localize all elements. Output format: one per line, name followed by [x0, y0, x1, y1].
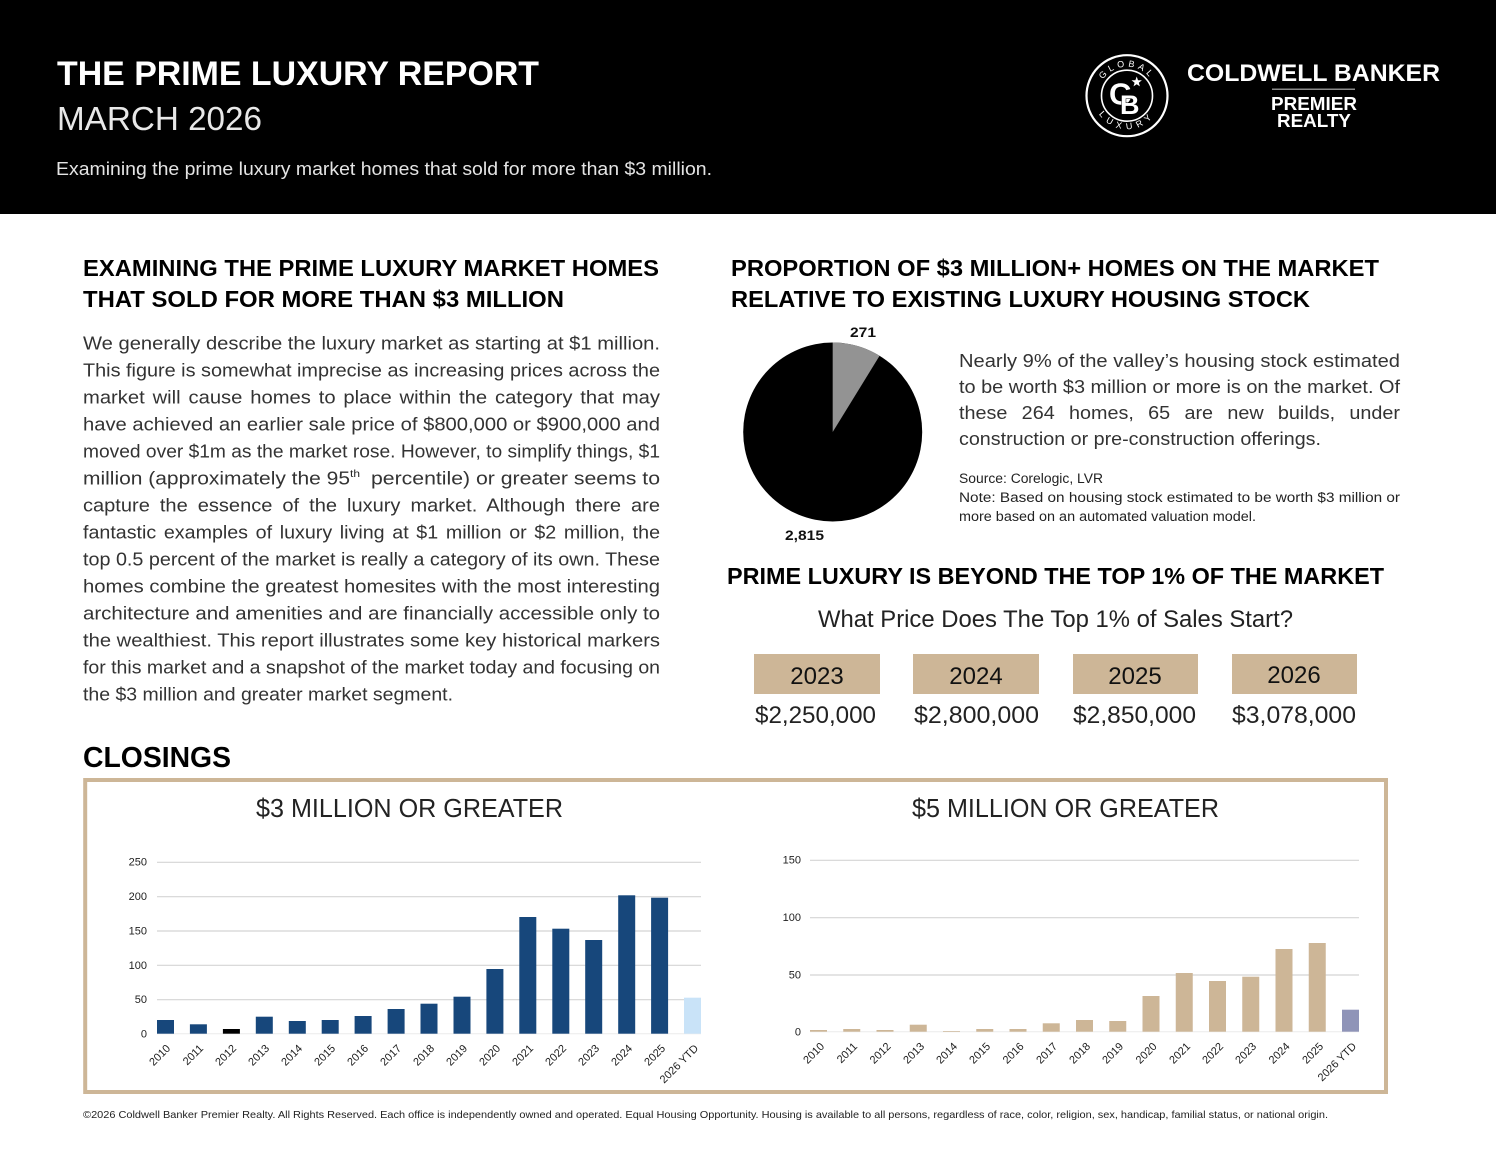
article body text: for this market and a snapshot of the market today and focusing on — [83, 658, 660, 678]
panel: intro article — [83, 255, 660, 704]
proportion description: these 264 homes, 65 are new builds, under — [959, 403, 1400, 423]
closings heading: CLOSINGS — [83, 742, 231, 774]
x axis labels: 2013 — [901, 1041, 927, 1066]
proportion description — [959, 351, 1401, 449]
bars — [810, 943, 1359, 1032]
footer disclaimer: ©2026 Coldwell Banker Premier Realty. All Rights Reserved. Each office is independently owned and operated. Equal Housing Opportunity. Housing is available to all persons, regardless of race, color, religion, sex, handicap, familial status, or national origin. — [83, 1109, 1328, 1121]
x axis labels: 2015 — [967, 1041, 993, 1066]
x axis labels — [147, 1043, 701, 1086]
x axis labels: 2017 — [378, 1043, 404, 1068]
y axis labels — [129, 856, 147, 1040]
x axis labels: 2010 — [801, 1041, 827, 1066]
x axis labels: 2016 — [1001, 1041, 1027, 1066]
chart title: $3 MILLION OR GREATER — [256, 793, 563, 823]
year card 2026 — [1232, 654, 1357, 729]
panel: closings frame — [85, 780, 1386, 1092]
top 1% question: What Price Does The Top 1% of Sales Start? — [818, 606, 1293, 633]
brand wordmark: PREMIER — [1271, 93, 1357, 114]
x axis labels: 2025 — [642, 1043, 668, 1068]
proportion heading: RELATIVE TO EXISTING LUXURY HOUSING STOCK — [731, 286, 1310, 312]
source note: Note: Based on housing stock estimated to be worth $3 million or — [959, 490, 1401, 505]
y axis labels — [783, 854, 801, 1038]
x axis labels: 2024 — [1267, 1041, 1293, 1066]
y axis labels: 50 — [135, 994, 147, 1006]
y axis labels: 100 — [129, 960, 147, 972]
year card 2026: $3,078,000 — [1232, 702, 1356, 729]
x axis labels: 2022 — [1200, 1041, 1226, 1066]
x axis labels: 2023 — [1233, 1041, 1259, 1066]
chart title: $5 MILLION OR GREATER — [912, 793, 1219, 823]
article body text: million (approximately the 95 — [83, 468, 350, 488]
x axis labels: 2019 — [444, 1043, 470, 1068]
article body text: fantastic examples of luxury living at $1 million or $2 million, the — [83, 522, 660, 542]
article body text: market will cause homes to place within the category that may — [83, 388, 660, 408]
proportion description: construction or pre-construction offerings. — [959, 429, 1321, 449]
proportion heading: PROPORTION OF $3 MILLION+ HOMES ON THE MARKET — [731, 255, 1379, 281]
y axis labels: 250 — [129, 856, 147, 868]
y axis labels: 50 — [789, 970, 801, 982]
bars — [157, 895, 701, 1034]
article body text: We generally describe the luxury market as starting at $1 million. — [83, 334, 660, 354]
x axis labels: 2016 — [345, 1043, 371, 1068]
header band — [0, 0, 1496, 214]
article body text: the $3 million and greater market segment. — [83, 684, 453, 704]
brand wordmark — [1187, 60, 1440, 131]
x axis labels: 2010 — [147, 1043, 173, 1068]
x axis labels: 2018 — [411, 1043, 437, 1068]
year card 2024: $2,800,000 — [914, 702, 1039, 729]
header subtitle: Examining the prime luxury market homes that sold for more than $3 million. — [56, 158, 712, 179]
x axis labels: 2011 — [835, 1041, 860, 1066]
year card 2026: 2026 — [1267, 662, 1321, 689]
article body text: moved over $1m as the market rose. However, to simplify things, $1 — [83, 442, 660, 462]
panel: top 1% price — [727, 563, 1384, 729]
source note: more based on an automated valuation model. — [959, 509, 1256, 524]
year card 2023: $2,250,000 — [755, 702, 876, 729]
proportion description: Nearly 9% of the valley’s housing stock estimated — [959, 351, 1400, 371]
x axis labels: 2012 — [868, 1041, 894, 1066]
x axis labels: 2025 — [1300, 1041, 1326, 1066]
x axis labels: 2021 — [510, 1043, 536, 1068]
x axis labels: 2026 YTD — [658, 1043, 701, 1086]
x axis labels: 2019 — [1100, 1041, 1126, 1066]
proportion heading — [731, 255, 1379, 312]
x axis labels: 2024 — [609, 1043, 635, 1068]
x axis labels: 2023 — [576, 1043, 602, 1068]
x axis labels: 2011 — [181, 1043, 206, 1068]
icon: global luxury logo seal: C — [1109, 76, 1131, 112]
article body text: architecture and amenities and are financially accessible only to — [83, 604, 660, 624]
x axis labels: 2014 — [279, 1043, 305, 1068]
article heading: THAT SOLD FOR MORE THAN $3 MILLION — [83, 286, 564, 312]
y axis labels: 0 — [795, 1026, 801, 1038]
x axis labels: 2015 — [312, 1043, 338, 1068]
article body text — [83, 334, 660, 704]
year card 2024 — [913, 654, 1039, 729]
report title: THE PRIME LUXURY REPORT — [57, 55, 539, 93]
year card 2023 — [754, 654, 880, 729]
x axis labels: 2020 — [1134, 1041, 1160, 1066]
icon: global luxury logo seal: GLOBAL — [1099, 60, 1152, 78]
article body text: capture the essence of the luxury market. Although there are — [83, 496, 660, 516]
source note: Source: Corelogic, LVR — [959, 471, 1103, 486]
y axis labels: 150 — [129, 926, 147, 938]
x axis labels: 2012 — [213, 1043, 239, 1068]
year card 2025: $2,850,000 — [1073, 702, 1196, 729]
chart: $3 million or greater — [129, 793, 701, 1086]
x axis labels: 2018 — [1067, 1041, 1093, 1066]
year card 2024: 2024 — [949, 663, 1003, 690]
article body text: homes combine the greatest homesites with the most interesting — [83, 576, 660, 596]
y axis labels: 150 — [783, 854, 801, 866]
x axis labels: 2022 — [543, 1043, 569, 1068]
top 1% heading: PRIME LUXURY IS BEYOND THE TOP 1% OF THE MARKET — [727, 563, 1384, 589]
panel: proportion of homes on the market — [731, 255, 1401, 543]
article heading — [83, 255, 659, 312]
report date: MARCH 2026 — [57, 100, 262, 137]
year card 2023: 2023 — [790, 663, 844, 690]
article heading: EXAMINING THE PRIME LUXURY MARKET HOMES — [83, 255, 659, 281]
article body text: th — [350, 468, 360, 480]
proportion description: to be worth $3 million or more is on the market. Of — [959, 377, 1401, 397]
x axis labels: 2021 — [1167, 1041, 1193, 1066]
y axis labels: 0 — [141, 1028, 147, 1040]
y axis labels: 200 — [129, 891, 147, 903]
pie chart: 2,815 — [785, 527, 824, 543]
pie chart: 271 — [850, 324, 876, 340]
x axis labels: 2013 — [246, 1043, 272, 1068]
x axis labels: 2026 YTD — [1316, 1041, 1359, 1084]
article body text: have achieved an earlier sale price of $800,000 or $900,000 and — [83, 414, 660, 434]
brand wordmark: COLDWELL BANKER — [1187, 60, 1440, 87]
brand wordmark: REALTY — [1277, 110, 1352, 131]
year card 2025 — [1073, 654, 1198, 729]
x axis labels: 2020 — [477, 1043, 503, 1068]
pie chart — [743, 324, 922, 543]
x axis labels: 2017 — [1034, 1041, 1060, 1066]
article body text: top 0.5 percent of the market is really a category of its own. These — [83, 550, 660, 570]
x axis labels — [801, 1041, 1359, 1084]
y axis labels: 100 — [783, 912, 801, 924]
article body text: the wealthiest. This report illustrates some key historical markers — [83, 630, 660, 650]
year card 2025: 2025 — [1108, 663, 1162, 690]
article body text: This figure is somewhat imprecise as increasing prices across the — [83, 360, 660, 380]
source note — [959, 471, 1401, 524]
article body text: percentile) or greater seems to — [371, 468, 660, 488]
icon: global luxury logo seal: B — [1120, 90, 1140, 120]
chart: $5 million or greater — [783, 793, 1359, 1084]
icon: global luxury logo seal: LUXURY — [1099, 110, 1150, 130]
x axis labels: 2014 — [934, 1041, 960, 1066]
icon: global luxury logo seal — [1085, 54, 1169, 138]
